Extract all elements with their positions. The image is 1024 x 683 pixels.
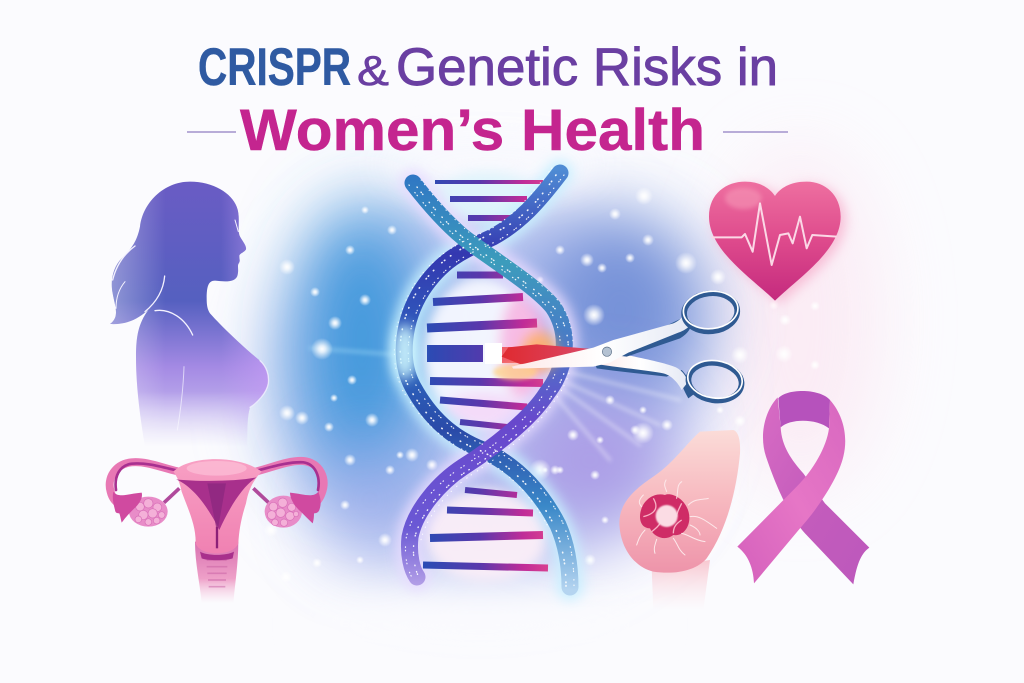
ribbon back loop [778,391,830,428]
title line 1: & [357,47,389,94]
tumour [640,494,689,538]
infographic canvas [106,46,876,606]
chest fade [652,560,710,610]
breast with tumour [619,430,740,610]
sparkles [264,187,820,583]
cut rung with break [393,324,558,380]
tumour veins [637,480,717,555]
heart highlight [725,188,762,209]
title [187,38,788,163]
dna strand sparkle dots [394,168,574,587]
ovary ligaments [164,488,269,503]
dna rungs [423,182,548,568]
dna strand back [404,173,570,587]
title line 1: CRISPR [198,38,351,97]
uterus and ovaries [110,459,324,603]
fallopian tubes [110,461,324,507]
heart with ecg [709,182,846,304]
ribbon left band and tail [763,397,869,584]
awareness ribbon [737,391,869,584]
light rays [310,348,680,460]
ribbon right band and tail [737,400,845,583]
vaginal canal [195,542,238,603]
woman silhouette [110,182,269,447]
title line 2: Women’s Health [240,98,705,163]
title line 1 [198,38,778,97]
dna strand front [409,183,564,577]
scissors pivot [602,347,612,356]
title line 1: Genetic Risks in [396,38,778,97]
woman hair and body highlights [113,220,269,430]
right ovary [265,496,302,528]
right title dash [723,131,788,133]
uterus body [173,459,262,560]
fimbriae [113,492,142,523]
dna lobe highlights [423,172,550,581]
left title dash [187,131,236,133]
lower blade and handle [502,344,745,404]
dna double helix [393,168,574,587]
dna strand glow [404,173,570,587]
left ovary [129,497,168,527]
scissors [502,289,745,404]
upper blade and handle [512,289,740,369]
ecg line [712,203,837,265]
